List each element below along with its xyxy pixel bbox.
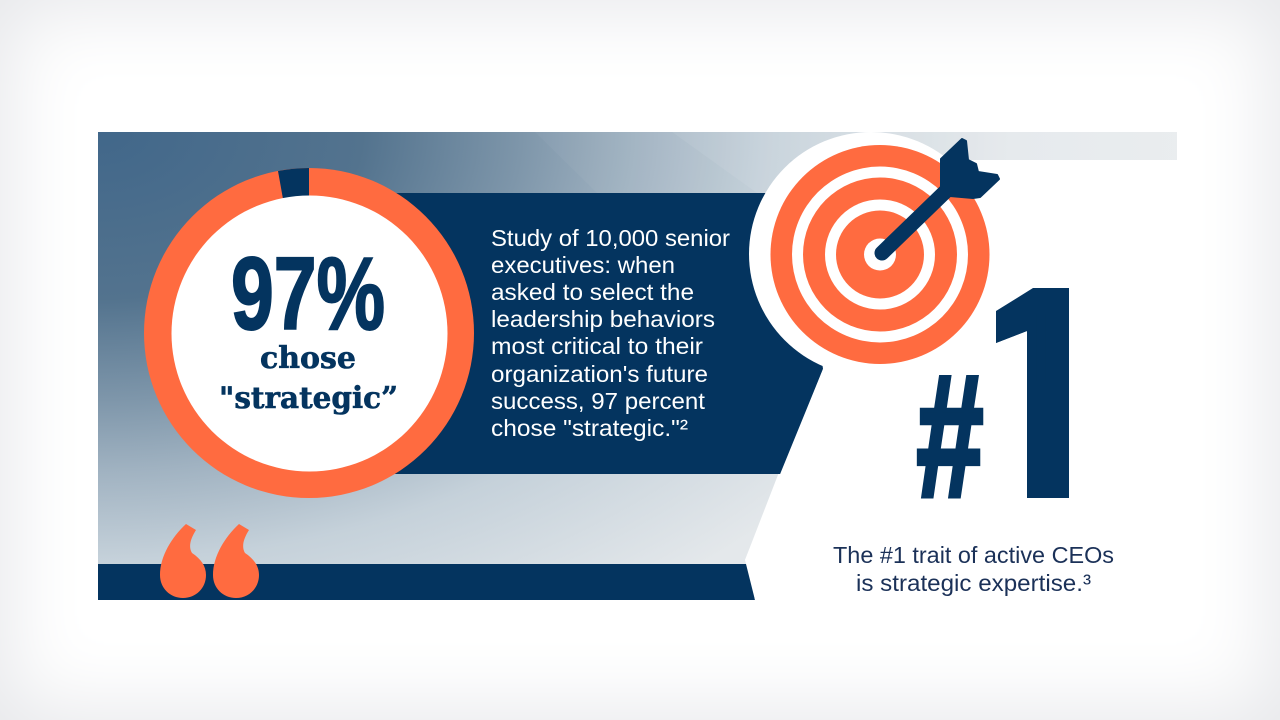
stat: #1: 1 xyxy=(965,236,1105,560)
text block: study description: success, 97 percent xyxy=(491,388,706,414)
panel: navy text band xyxy=(380,193,823,474)
text block: study description: executives: when xyxy=(491,252,675,278)
text block: caption xyxy=(833,542,1114,596)
text block: study description: organization's future xyxy=(491,361,708,387)
panel: subtle facet xyxy=(535,132,757,193)
text block: study description: most critical to their xyxy=(491,333,703,359)
text block: study description: Study of 10,000 senior xyxy=(491,225,730,251)
text block: study description xyxy=(491,225,730,441)
panel: white backing for target and number xyxy=(745,160,1177,600)
text block: study description: asked to select the xyxy=(491,279,694,305)
donut chart: 97 percent xyxy=(144,168,474,498)
panel: light facet xyxy=(672,132,1177,193)
text block: study description: chose "strategic."² xyxy=(491,415,688,441)
stat: 97%: 97% xyxy=(231,236,385,351)
panel: navy bottom strip xyxy=(98,564,755,600)
stat: #1: # xyxy=(916,338,984,533)
text block: study description: leadership behaviors xyxy=(491,306,715,332)
label: chose strategic: "strategic” xyxy=(219,381,398,416)
label: chose strategic: chose xyxy=(260,341,356,376)
label: chose strategic xyxy=(219,341,398,416)
icon: target with arrow xyxy=(749,132,999,376)
panel: gradient background band xyxy=(98,132,1177,564)
text block: caption: The #1 trait of active CEOs xyxy=(833,542,1114,568)
text block: caption: is strategic expertise.³ xyxy=(856,570,1091,596)
icon: quotation marks xyxy=(160,524,259,598)
stat: #1 xyxy=(916,288,1069,498)
